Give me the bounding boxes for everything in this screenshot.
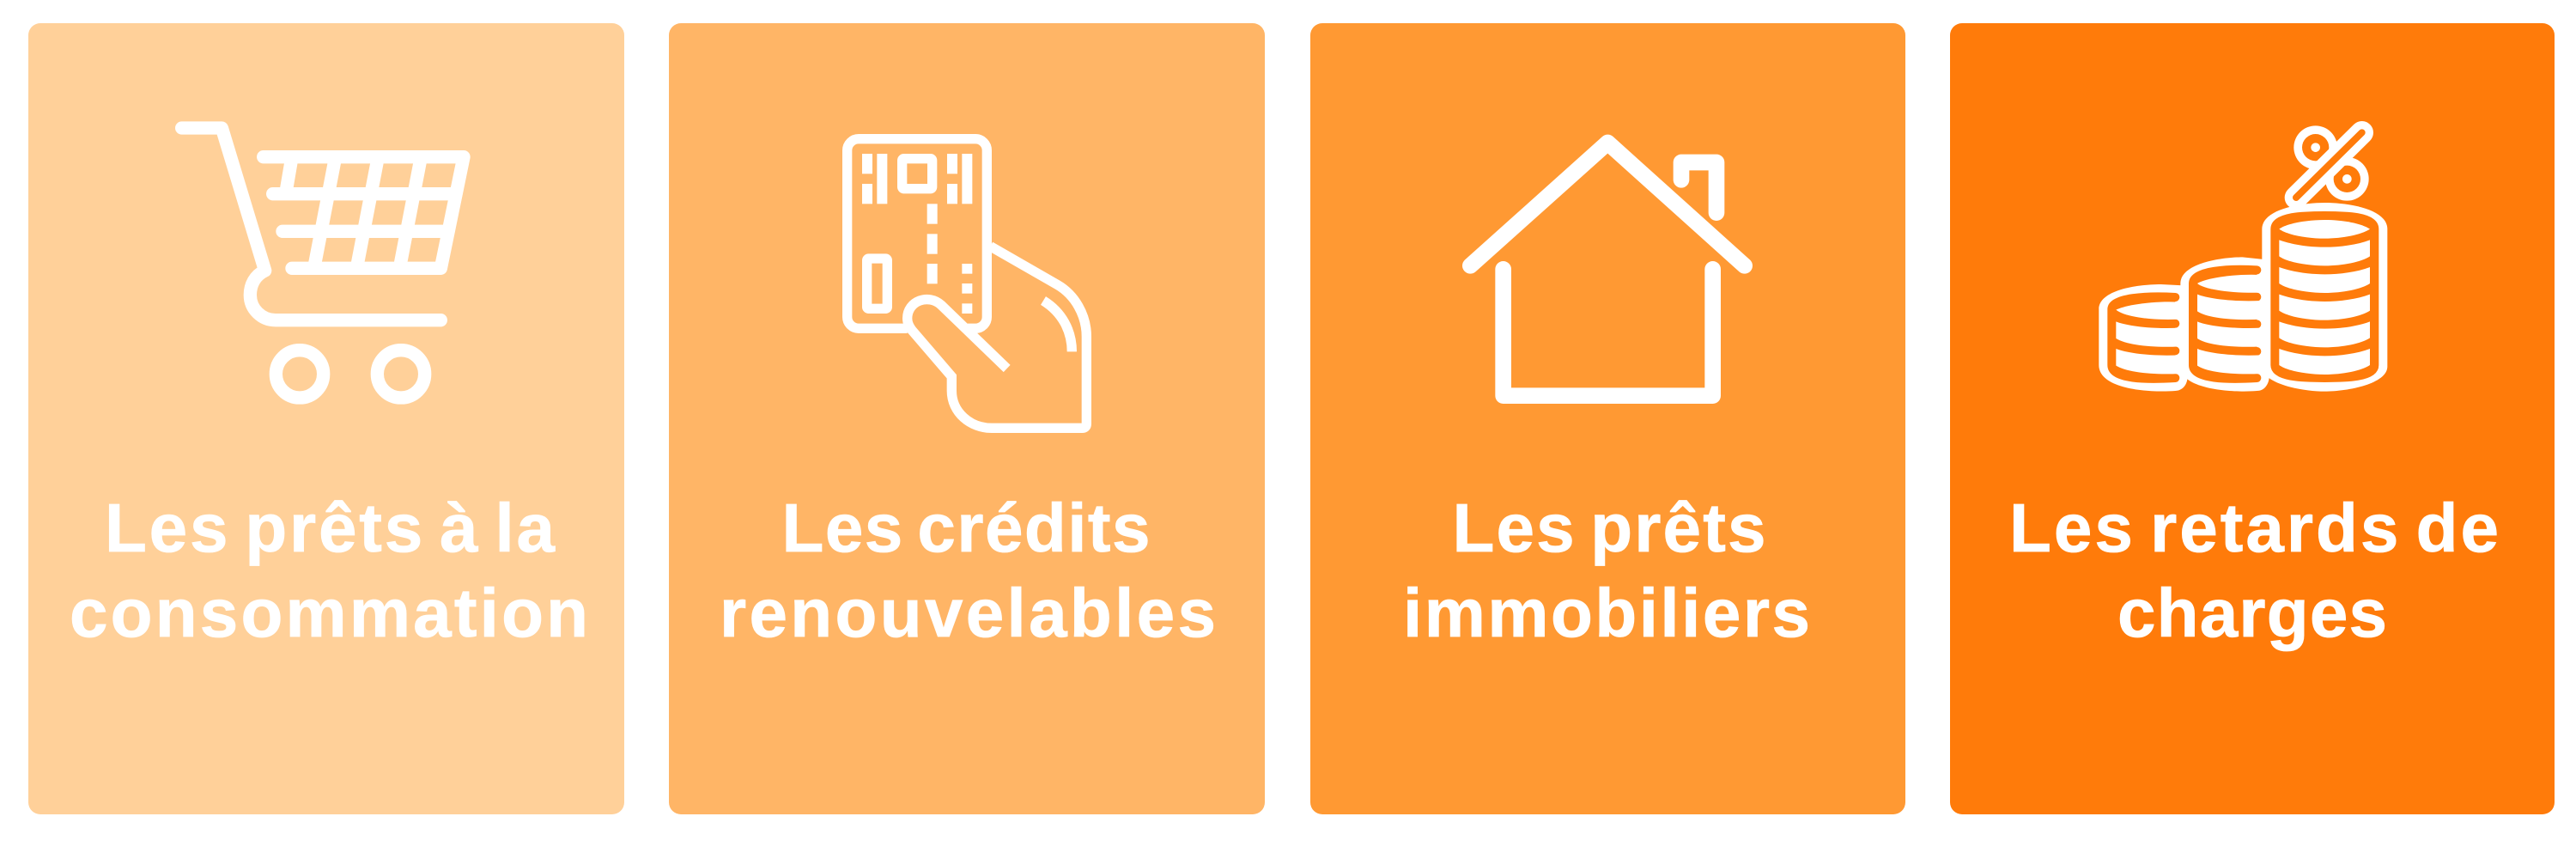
panel: les crédits renouvelables <box>669 23 1265 814</box>
icon: credit card in hand <box>848 139 1086 428</box>
heading: les retards de charges: charges <box>2117 575 2387 651</box>
heading: les crédits renouvelables <box>720 490 1216 651</box>
heading: les retards de charges <box>2009 490 2499 651</box>
heading: les prêts immobiliers: immobiliers <box>1403 575 1810 651</box>
heading: les retards de charges: Les retards de <box>2009 490 2499 566</box>
panel: les retards de charges <box>1950 23 2555 814</box>
heading: les prêts à la consommation <box>70 490 588 651</box>
heading: les prêts immobiliers: Les prêts <box>1453 490 1765 566</box>
heading: les crédits renouvelables: Les crédits <box>781 490 1151 566</box>
heading: les crédits renouvelables: renouvelables <box>720 575 1216 651</box>
heading: les prêts immobiliers <box>1403 490 1810 651</box>
icon: house <box>1470 143 1745 396</box>
heading: les prêts à la consommation: Les prêts à la <box>105 490 555 566</box>
icon: shopping cart <box>182 128 464 398</box>
icon: coin stacks with percent sign <box>2099 125 2387 392</box>
heading: les prêts à la consommation: consommation <box>70 575 588 651</box>
panel: les prêts immobiliers <box>1310 23 1905 814</box>
panel: les prêts à la consommation <box>28 23 624 814</box>
